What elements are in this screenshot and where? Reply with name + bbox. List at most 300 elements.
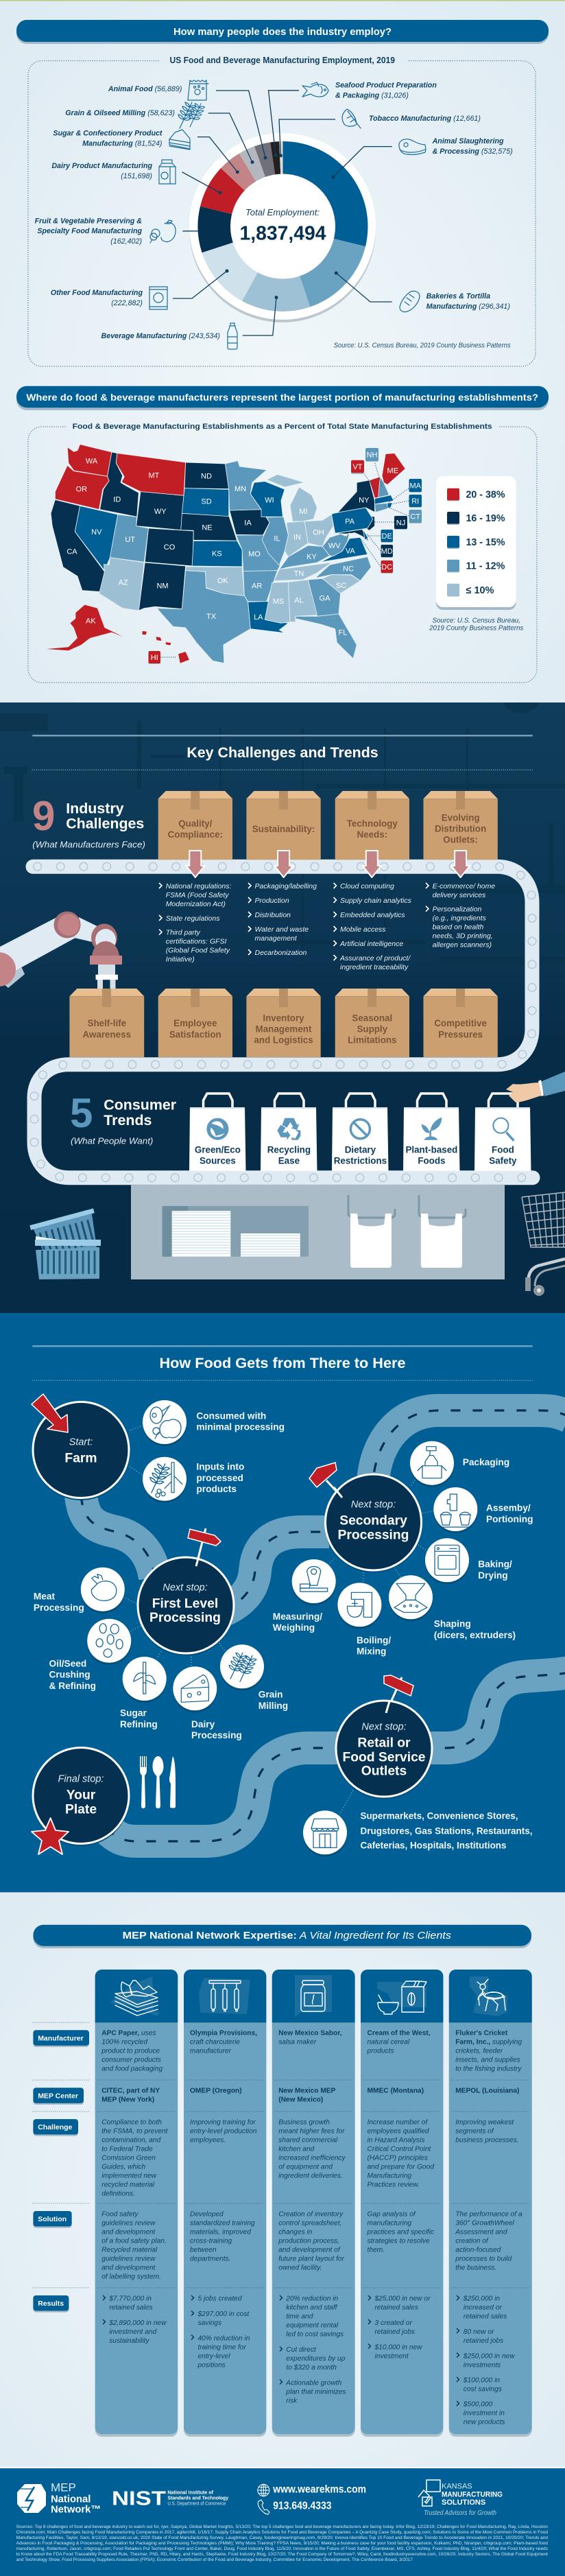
state abbreviations: WI — [265, 497, 274, 505]
challenge text: Critical Control Point — [368, 2145, 432, 2153]
heading pill: employment — [16, 20, 549, 44]
manufacturer text — [366, 2030, 431, 2055]
stop: first level processing: Processing — [149, 1611, 221, 1625]
results text: investments — [464, 2361, 501, 2369]
results text — [368, 2295, 431, 2360]
labels: farm outputs: Inputs into — [196, 1462, 244, 1472]
stop: retail — [335, 1701, 433, 1799]
manufacturer text: Cream of the West, — [368, 2030, 431, 2037]
stop: retail: Next stop: — [361, 1722, 407, 1733]
results text — [103, 2295, 167, 2345]
legend: ≤ 10% — [466, 585, 494, 596]
state abbreviations: NM — [156, 582, 169, 590]
box: sustainability — [246, 791, 321, 860]
results text: $7,770,000 in — [108, 2295, 152, 2303]
labels: first level processing: Sugar — [120, 1708, 147, 1718]
challenge text: in Hazard Analysis — [368, 2136, 425, 2144]
icon circle: packaging — [410, 1441, 454, 1487]
total employment: 1,837,494 — [240, 222, 326, 244]
labels left: Manufacturing (81,524) — [82, 140, 162, 148]
sign: retail — [384, 1675, 413, 1713]
icon circle: meat processing — [81, 1568, 125, 1614]
source note: 2019 County Business Patterns — [429, 625, 523, 633]
labels: secondary processing: Portioning — [486, 1514, 533, 1524]
results text: 3 created or — [374, 2319, 412, 2327]
logo: NIST: U.S. Department of Commerce — [167, 2500, 226, 2506]
challenge text: Manufacturing — [368, 2172, 411, 2179]
solution text: cross-training — [190, 2238, 232, 2245]
stop: farm: Farm — [64, 1452, 97, 1466]
results text: Actionable growth — [285, 2379, 342, 2387]
box: seasonal — [335, 989, 409, 1057]
labels left — [35, 85, 220, 340]
box: shelf-life: Shelf-life — [88, 1018, 126, 1028]
list: quality: Third party — [166, 929, 201, 937]
heading pill: map — [16, 386, 549, 410]
stop: retail: Food Service — [342, 1750, 426, 1764]
solution text: strategies to resolve — [368, 2238, 430, 2245]
heading: consumer trends: Consumer — [104, 1096, 176, 1113]
manufacturer text: products — [366, 2048, 394, 2055]
labels: farm outputs: minimal processing — [196, 1422, 285, 1432]
list: quality: (Global Food Safety — [166, 947, 230, 955]
state abbreviations: NY — [359, 497, 370, 505]
results text: training time for — [197, 2343, 246, 2351]
section background: MEP network — [0, 1892, 565, 2467]
row label: solution — [33, 2211, 72, 2228]
solution text — [278, 2211, 345, 2272]
challenge text: segments of — [455, 2127, 494, 2135]
panel: state map — [28, 423, 537, 683]
stop: retail: Retail or — [357, 1736, 411, 1751]
legend: 13 - 15% — [466, 537, 505, 548]
challenge text: recycled material — [101, 2181, 155, 2188]
results text: plan that minimizes — [285, 2388, 346, 2396]
labels: first level processing: & Refining — [49, 1681, 96, 1691]
challenge text: implemented new — [101, 2172, 157, 2179]
solution text: of a food safety plan. — [101, 2238, 167, 2245]
state abbreviations: ME — [387, 466, 398, 475]
solution text: Recycled material — [101, 2247, 158, 2254]
section top edge — [0, 1892, 565, 1893]
bag: green sources: Sources — [200, 1156, 236, 1166]
manufacturer text: salsa maker — [278, 2039, 317, 2046]
solution text: guidelines review — [101, 2220, 156, 2228]
state abbreviations: AZ — [119, 578, 128, 587]
icon circle: assembly — [433, 1487, 477, 1533]
box: competitive — [424, 989, 498, 1057]
sign: secondary — [309, 1463, 342, 1498]
heading: industry challenges: Challenges — [66, 816, 144, 832]
state abbreviations: TN — [294, 570, 304, 578]
solution text: changes in — [278, 2229, 313, 2236]
labels left: (151,698) — [121, 172, 152, 180]
solution text: Food safety — [101, 2211, 139, 2219]
list: sustainability: Water and waste — [255, 925, 309, 934]
manufacturer text: consumer products — [101, 2057, 161, 2064]
stop: secondary processing: Secondary — [339, 1514, 407, 1528]
heading: consumer trends: (What People Want) — [71, 1136, 153, 1146]
solution text: processes to build — [455, 2256, 512, 2263]
top accent line — [0, 0, 565, 1]
challenge text: Increase number of — [368, 2118, 428, 2126]
challenge text: (HACCP) principles — [368, 2154, 428, 2162]
challenge text: contamination, and — [101, 2136, 161, 2144]
results text: cost savings — [464, 2386, 502, 2394]
row label: MEP center — [33, 2088, 84, 2105]
labels: secondary processing: Assemby/ — [486, 1503, 531, 1513]
results text: expenditures by up — [286, 2355, 346, 2363]
solution text: and development — [101, 2229, 156, 2236]
heading: industry challenges — [32, 801, 145, 850]
state abbreviations: VA — [346, 547, 355, 556]
state abbreviations: MN — [235, 485, 246, 493]
row label: manufacturer: Manufacturer — [38, 2035, 84, 2043]
labels: first level processing: Milling — [259, 1701, 288, 1711]
big number: 5: 5 — [70, 1090, 93, 1136]
labels: secondary processing: Baking/ — [478, 1559, 512, 1570]
challenge text: definitions. — [101, 2190, 135, 2197]
manufacturer text: craft charcuterie — [190, 2039, 240, 2046]
sources text — [16, 2525, 548, 2562]
state abbreviations: LA — [254, 613, 263, 622]
road — [81, 1410, 565, 1841]
column: Cream of the West — [361, 1970, 443, 2437]
box: quality: Compliance: — [168, 829, 223, 840]
MEP center text: MEPOL (Louisiana) — [455, 2087, 519, 2094]
state abbreviations: CO — [164, 543, 176, 552]
challenge text: Improving training for — [190, 2118, 256, 2126]
solution text: the business. — [455, 2265, 496, 2272]
labels: secondary processing: Mixing — [357, 1646, 386, 1657]
results text: equipment rental — [286, 2322, 339, 2330]
manufacturer text: product to produce — [101, 2048, 160, 2055]
map of US states — [47, 445, 405, 663]
big number: 9: 9 — [32, 793, 55, 839]
state abbreviations: AR — [252, 582, 262, 591]
state abbreviations: SD — [201, 498, 212, 506]
list: distribution: allergen scanners) — [433, 941, 492, 949]
labels: farm outputs — [196, 1410, 285, 1494]
results text: $500,000 — [463, 2401, 493, 2409]
challenge text: employees. — [190, 2136, 226, 2144]
state silhouette: Montana — [377, 1982, 426, 2007]
list: distribution: needs, 3D printing, — [433, 932, 493, 941]
bag: recycling: Recycling — [267, 1144, 311, 1155]
source note: Source: U.S. Census Bureau, — [432, 617, 520, 624]
results text — [280, 2295, 346, 2404]
arrow: start — [32, 1394, 68, 1432]
legend: 20 - 38% — [466, 489, 505, 500]
row label: manufacturer — [33, 2030, 89, 2047]
state abbreviations: WA — [86, 458, 98, 466]
box: technology: Needs: — [357, 829, 387, 840]
labels left: Specialty Food Manufacturing — [37, 227, 142, 235]
logo: NIST: National Institute of — [167, 2490, 213, 2496]
box: seasonal: Supply — [357, 1024, 388, 1034]
bag: green sources — [189, 1094, 245, 1171]
labels: retail outlets: Supermarkets, Convenience Stores, — [361, 1811, 518, 1821]
footer background — [0, 2468, 565, 2576]
results text: Cut direct — [286, 2346, 317, 2354]
labels right: Animal Slaughtering — [432, 137, 504, 145]
results text: increased or — [464, 2304, 502, 2312]
challenge text: Business growth — [278, 2118, 330, 2126]
MEP center text: (New Mexico) — [278, 2096, 323, 2103]
manufacturer text: 100% recycled — [101, 2039, 147, 2046]
callouts: small states: DE — [382, 532, 392, 541]
sources text: Sources: Top 8 challenges of food and beverage industry to watch out for, Iyer, Saipriya, Global Market Insights, 5/13/20; The top 5 challenges food and beverage manufacturers are facing today, Infor Blog, 12/23/19; Challenges for Food Manufacturing, Ray, Linda, Houston — [16, 2525, 548, 2529]
challenge text: Comission Green — [101, 2154, 156, 2162]
solution text: practices and specific — [366, 2229, 434, 2236]
logo: Kansas Manufacturing Solutions: SOLUTIONS — [442, 2498, 485, 2507]
results text: retained sales — [374, 2304, 418, 2312]
state abbreviations: KS — [212, 550, 222, 558]
results text: $10,000 in new — [374, 2343, 422, 2351]
state abbreviations: WY — [154, 508, 167, 516]
background: light section top — [0, 0, 565, 702]
labels: secondary processing — [273, 1457, 533, 1657]
labels right: & Processing (532,575) — [433, 147, 513, 156]
challenge text: Practices review. — [368, 2181, 420, 2188]
labels: secondary processing: Boiling/ — [357, 1635, 391, 1645]
labels left: Grain & Oilseed Milling (58,623) — [65, 109, 175, 117]
labels right: Manufacturing (296,341) — [426, 303, 510, 311]
state abbreviations: AK — [86, 617, 96, 625]
box: shelf-life — [69, 989, 144, 1057]
results text: positions — [197, 2361, 226, 2369]
logo: MEP National Network — [17, 2481, 101, 2515]
state abbreviations: NV — [91, 528, 102, 536]
results text: kitchen and staff — [286, 2304, 338, 2312]
solution text: Assessment and — [455, 2229, 507, 2236]
callouts: small states: RI — [411, 497, 419, 506]
logo: Kansas Manufacturing Solutions: KANSAS — [442, 2483, 472, 2491]
icon circle: baking — [425, 1538, 469, 1584]
labels: first level processing: Crushing — [49, 1670, 91, 1680]
challenge text: meant higher fees for — [278, 2127, 345, 2135]
contact: phone: 913.649.4333 — [273, 2500, 332, 2512]
list: quality: National regulations: — [166, 882, 232, 890]
labels: first level processing: Processing — [191, 1730, 242, 1740]
state silhouette: New York — [110, 1976, 160, 2016]
legend: 16 - 19% — [466, 513, 505, 524]
dotted rule — [32, 1380, 533, 1381]
solution text: departments. — [190, 2256, 230, 2263]
labels: secondary processing: Measuring/ — [273, 1611, 322, 1622]
list: sustainability: management — [255, 934, 298, 943]
state abbreviations: NC — [343, 565, 354, 573]
results text: retained jobs — [374, 2328, 415, 2336]
icon circle: oilseed — [87, 1619, 131, 1665]
results text: entry-level — [197, 2352, 230, 2360]
manufacturer text: Farm, Inc., supplying — [455, 2039, 522, 2046]
manufacturer text: Olympia Provisions, — [190, 2030, 257, 2037]
conveyor belt — [33, 866, 533, 1178]
state silhouette: Louisiana — [470, 1976, 507, 2016]
box: inventory: and Logistics — [254, 1035, 313, 1045]
results text: investment and — [109, 2328, 157, 2336]
MEP center text: New Mexico MEP — [278, 2087, 336, 2094]
state abbreviations: NE — [202, 524, 213, 532]
cutlery — [140, 1756, 176, 1808]
challenge text: to Federal Trade — [101, 2145, 153, 2153]
solution text — [366, 2211, 434, 2254]
row dotted lines left — [33, 2022, 91, 2288]
bag: food safety: Safety — [489, 1156, 517, 1166]
state abbreviations: KY — [306, 553, 317, 561]
labels left: (162,402) — [110, 237, 142, 246]
box: inventory — [246, 989, 321, 1057]
heading pill: map: Where do food & beverage manufacturers represent the largest portion of manufacturing establishments? — [26, 392, 538, 403]
state abbreviations: MI — [299, 508, 308, 516]
box: technology — [335, 791, 409, 860]
heading pill: MEP network: MEP National Network Expertise: A Vital Ingredient for Its Clients — [123, 1930, 451, 1941]
manufacturer text: and food packaging — [101, 2066, 163, 2073]
labels: first level processing — [34, 1592, 288, 1740]
manufacturer text: New Mexico Sabor, — [278, 2030, 342, 2037]
results text: $250,000 in — [463, 2295, 500, 2303]
state abbreviations: GA — [320, 594, 330, 602]
shelf with paper bag stacks — [162, 1206, 309, 1257]
box: employee: Satisfaction — [169, 1029, 221, 1039]
row label: MEP center: MEP Center — [38, 2092, 78, 2101]
solution text: and development of — [278, 2247, 341, 2254]
logo: NIST — [112, 2488, 229, 2510]
icon: cereal box and bowl — [378, 1981, 426, 2014]
box: inventory: Inventory — [263, 1013, 304, 1023]
row label: results — [33, 2295, 69, 2313]
list: technology: ingredient traceability — [340, 963, 409, 971]
state abbreviations: WV — [328, 542, 341, 550]
solution text: owned facility. — [278, 2265, 322, 2272]
results text — [457, 2295, 515, 2426]
challenge text: kitchen and — [278, 2145, 315, 2153]
list: quality: certifications: GFSI — [166, 938, 226, 946]
state abbreviations: OR — [76, 486, 87, 494]
MEP center text — [101, 2087, 160, 2103]
callouts: small states: CT — [410, 513, 420, 521]
logo: Kansas Manufacturing Solutions: Trusted Advisors for Growth — [424, 2509, 496, 2517]
solution text: action-focused — [455, 2247, 501, 2254]
state abbreviations: SC — [336, 582, 346, 590]
list: quality: Modernization Act) — [166, 900, 226, 908]
stop: secondary processing — [325, 1474, 422, 1572]
leader lines — [173, 91, 392, 335]
MEP center text: CITEC, part of NY — [101, 2087, 160, 2094]
list: distribution: (e.g., ingredients — [433, 914, 487, 923]
stop: secondary processing: Next stop: — [351, 1499, 396, 1510]
sources text: manufacturing, Robertson, Jason, crbgroup.com; Food Retailers Put Technology Front and Center, Baker, Doug, Food Industry Blog, 11/5/20; Innovation is the Future of Food Safety, Eisenbeiser, MS, CFS, Ashley, Food Industry Blog, 11/4/20; What the Food Industry needs — [16, 2547, 548, 2551]
arrows: challenges to details — [187, 851, 470, 877]
list: distribution — [426, 882, 495, 949]
contact: phone — [258, 2500, 332, 2514]
logo: NIST: NIST — [112, 2488, 167, 2510]
challenge text — [455, 2118, 519, 2144]
manufacturer text: crickets, feeder — [455, 2048, 503, 2055]
challenge text: of equipment and — [278, 2163, 333, 2171]
challenge text: Guides, which — [101, 2163, 146, 2171]
labels right: Tobacco Manufacturing (12,661) — [369, 115, 481, 123]
results text: sustainability — [109, 2337, 149, 2345]
box: seasonal: Limitations — [348, 1035, 397, 1045]
icon circle: store — [303, 1810, 347, 1856]
star — [32, 1818, 69, 1854]
solution text: future plant layout for — [278, 2256, 345, 2263]
bag: plant-based — [403, 1094, 459, 1171]
challenge text: increased inefficiency — [278, 2154, 346, 2162]
results text: investment in — [464, 2410, 505, 2418]
state abbreviations: AL — [294, 596, 304, 604]
bag: food safety — [474, 1094, 531, 1171]
box: sustainability: Sustainability: — [252, 824, 315, 834]
solution text: materials, improved — [190, 2229, 251, 2236]
row label: results: Results — [38, 2300, 64, 2308]
stop: your plate: Your — [67, 1788, 96, 1803]
section rule — [32, 1345, 533, 1347]
state abbreviations: MS — [273, 598, 284, 606]
state abbreviations: CA — [67, 547, 77, 556]
MEP center text: OMEP (Oregon) — [190, 2087, 242, 2094]
solution text: production process, — [278, 2238, 339, 2245]
labels left: Dairy Product Manufacturing — [51, 162, 152, 170]
state abbreviations: UT — [125, 536, 135, 544]
heading: consumer trends: Trends — [104, 1112, 152, 1129]
dotted connectors — [123, 1426, 433, 1815]
labels: secondary processing: Packaging — [463, 1457, 509, 1467]
labels: farm outputs: processed — [196, 1473, 243, 1483]
callouts: small states: DC — [381, 563, 392, 571]
section background: challenges and trends — [0, 702, 565, 1313]
state abbreviations: ID — [113, 496, 121, 504]
challenge text: Improving weakest — [455, 2118, 514, 2126]
state abbreviations: ND — [201, 473, 212, 481]
callouts: small states: MA — [409, 482, 422, 490]
column: APC Paper — [95, 1970, 178, 2437]
list: technology: Embedded analytics — [340, 911, 405, 919]
labels: first level processing: Processing — [34, 1603, 84, 1613]
challenge text: business processes. — [455, 2136, 519, 2144]
dotted rule — [32, 769, 533, 770]
labels: first level processing: Grain — [259, 1690, 283, 1700]
state abbreviations: IA — [244, 519, 252, 528]
bag: dietary — [332, 1094, 388, 1171]
solution text — [190, 2211, 255, 2263]
box: technology: Technology — [347, 818, 398, 829]
list: sustainability: Production — [255, 897, 289, 905]
total employment — [240, 207, 326, 244]
labels left: Other Food Manufacturing — [51, 289, 143, 297]
results text: 20% reduction in — [285, 2295, 339, 2303]
contact: website: www.wearekms.com — [272, 2483, 366, 2495]
logo: NIST: Standards and Technology — [167, 2495, 229, 2501]
sign: first level — [188, 1528, 221, 1566]
manufacturer text: APC Paper, uses — [101, 2030, 156, 2037]
labels right: Bakeries & Tortilla — [426, 292, 490, 300]
bag: dietary: Restrictions — [334, 1156, 387, 1166]
manufacturer text — [101, 2030, 163, 2073]
column: Olympia Provisions — [184, 1970, 266, 2437]
labels right — [335, 81, 513, 311]
manufacturer text: Fluker's Cricket — [455, 2030, 508, 2037]
sources text: Chronicle.com; Main Challenges facing Food Manufacturing Companies in 2017, agile/chill, 1/16/17; Supply Chain Analytics Solutions for Food and Beverage Companies – A Quantzig Case Study, quantzig.com; Solutions to Some of the Most Common Problems in Food — [16, 2530, 548, 2535]
list: distribution: delivery services — [433, 891, 486, 899]
callouts: small states: NH — [367, 451, 377, 460]
bag: plant-based: Plant-based — [405, 1144, 457, 1155]
labels left: Beverage Manufacturing (243,534) — [101, 332, 220, 340]
icon circle: grain milling — [220, 1644, 264, 1690]
manufacturer text: to the fishing industry — [455, 2066, 522, 2073]
